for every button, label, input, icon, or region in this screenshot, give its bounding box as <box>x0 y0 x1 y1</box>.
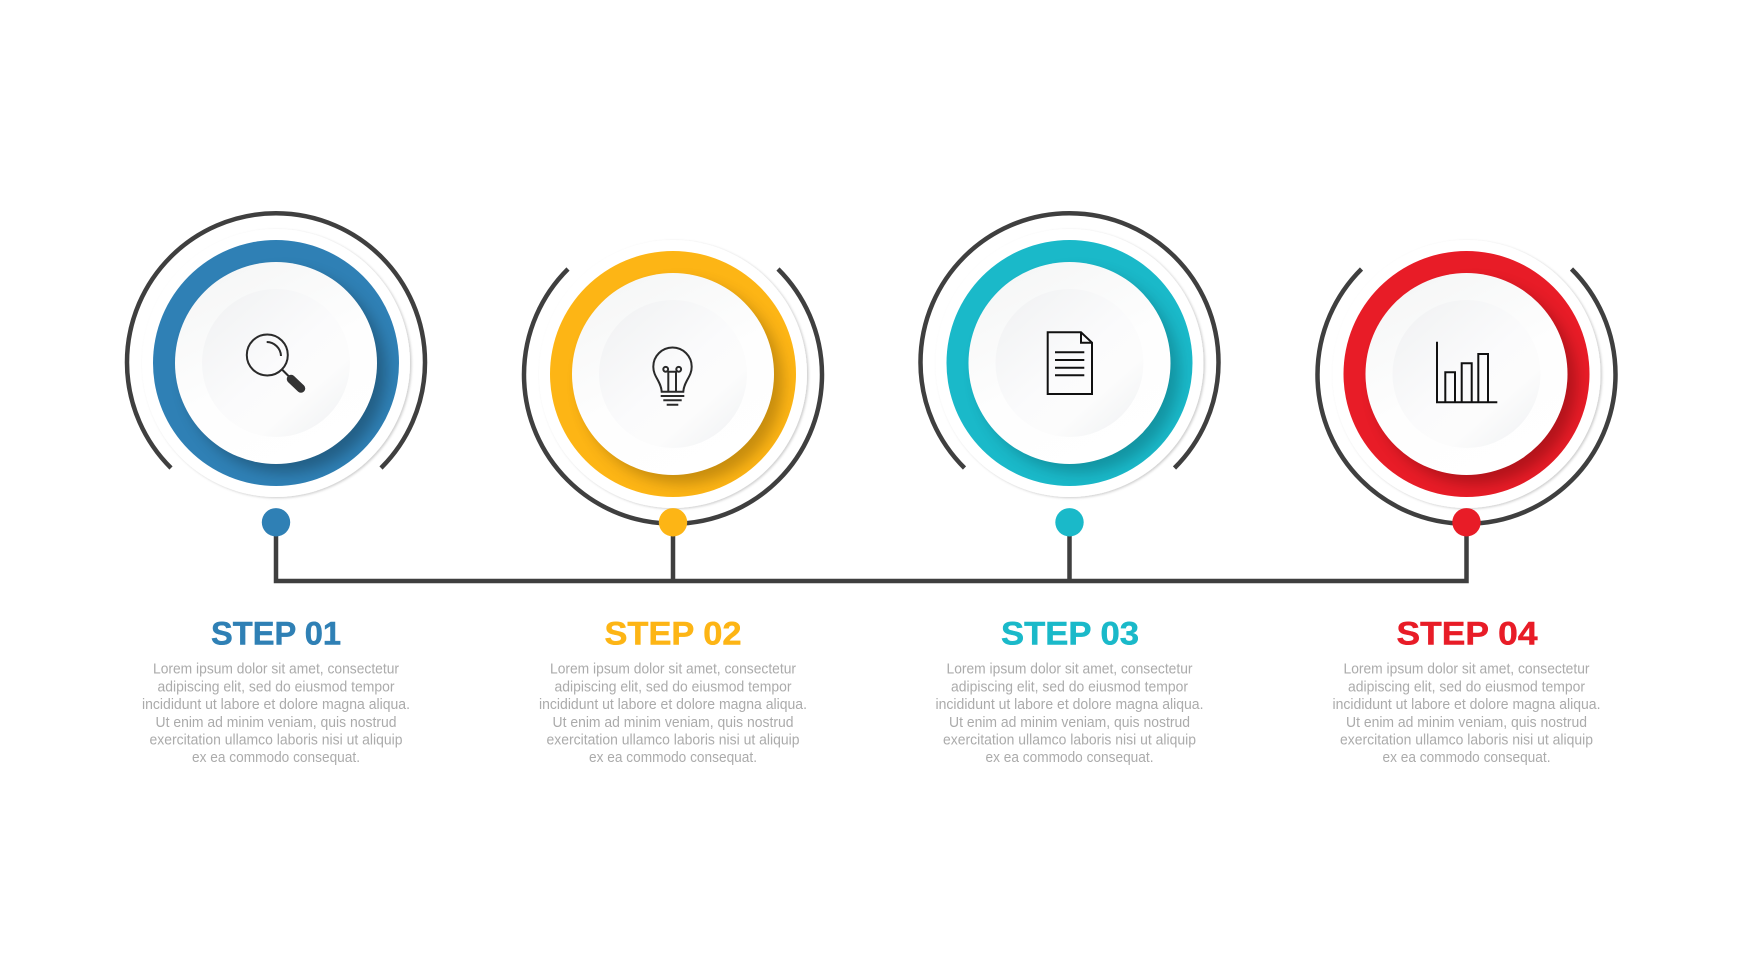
inner disc <box>1392 300 1540 448</box>
text block: step 01: adipiscing elit, sed do eiusmod tempor <box>158 679 395 695</box>
text block: step 01 <box>142 662 410 766</box>
text block: step 02 <box>539 662 807 766</box>
text block: step 02: adipiscing elit, sed do eiusmod tempor <box>554 679 792 695</box>
coloured ring <box>1344 251 1590 497</box>
text block: step 04: incididunt ut labore et dolore magna aliqua. <box>1332 697 1600 713</box>
dot: step 04 <box>1452 508 1481 536</box>
text block: step 02: Ut enim ad minim veniam, quis nostrud <box>552 715 794 731</box>
text block: step 03: incididunt ut labore et dolore magna aliqua. <box>936 697 1204 713</box>
text block: step 01: ex ea commodo consequat. <box>192 750 360 766</box>
icon: light bulb <box>653 347 692 405</box>
ring shadow <box>1374 282 1576 484</box>
panel: step 02 circle <box>524 240 822 524</box>
text block: step 01: incididunt ut labore et dolore magna aliqua. <box>142 697 410 713</box>
text block: step 03 <box>936 662 1204 766</box>
dot: step 02 <box>659 508 687 536</box>
text block: step 03: Lorem ipsum dolor sit amet, consectetur <box>946 662 1193 678</box>
text block: step 02: incididunt ut labore et dolore magna aliqua. <box>539 697 807 713</box>
ring shadow <box>184 271 386 473</box>
text block: step 04: Lorem ipsum dolor sit amet, consectetur <box>1344 662 1590 678</box>
text block: step 01: Ut enim ad minim veniam, quis nostrud <box>156 715 396 731</box>
panel: step 01 circle <box>127 213 425 497</box>
text block: step 04 <box>1332 662 1600 766</box>
text block: step 01: Lorem ipsum dolor sit amet, consectetur <box>153 662 399 678</box>
ring shadow <box>978 271 1180 473</box>
halo disc <box>936 229 1204 497</box>
coloured ring <box>153 240 399 486</box>
heading: step 01: STEP 01 <box>211 616 341 652</box>
heading: step 02: STEP 02 <box>604 616 742 652</box>
icon: bar chart <box>1437 342 1497 402</box>
halo disc <box>539 240 807 508</box>
connector line <box>276 535 1466 581</box>
coloured ring <box>550 251 796 497</box>
outer arc <box>1318 269 1616 524</box>
inner disc <box>599 300 747 448</box>
white plate <box>1366 273 1568 475</box>
dot: step 03 <box>1055 508 1084 536</box>
text block: step 04: ex ea commodo consequat. <box>1382 750 1550 766</box>
heading: step 04: STEP 04 <box>1396 616 1538 652</box>
text block: step 04: Ut enim ad minim veniam, quis nostrud <box>1346 715 1587 731</box>
text block: step 04: adipiscing elit, sed do eiusmod tempor <box>1348 679 1585 695</box>
text block: step 03: adipiscing elit, sed do eiusmod tempor <box>951 679 1188 695</box>
coloured ring <box>946 240 1192 486</box>
text block: step 03: Ut enim ad minim veniam, quis nostrud <box>949 715 1190 731</box>
text block: step 02: exercitation ullamco laboris nisi ut aliquip <box>546 732 800 748</box>
halo disc <box>1332 240 1600 508</box>
heading: step 03: STEP 03 <box>1001 616 1139 652</box>
text block: step 03: exercitation ullamco laboris nisi ut aliquip <box>943 732 1196 748</box>
icon: magnifier <box>247 334 301 388</box>
outer arc <box>921 213 1218 468</box>
inner disc <box>202 289 350 437</box>
white plate <box>175 262 377 464</box>
outer arc <box>524 269 822 524</box>
dot: step 01 <box>262 508 290 536</box>
inner disc <box>996 289 1144 437</box>
white plate <box>572 273 774 475</box>
outer arc <box>127 213 425 468</box>
text block: step 01: exercitation ullamco laboris nisi ut aliquip <box>150 732 402 748</box>
text block: step 02: Lorem ipsum dolor sit amet, consectetur <box>550 662 796 678</box>
white plate <box>968 262 1170 464</box>
panel: step 03 circle <box>921 213 1218 497</box>
icon: document <box>1048 332 1092 394</box>
text block: step 04: exercitation ullamco laboris nisi ut aliquip <box>1340 732 1593 748</box>
halo disc <box>142 229 410 497</box>
panel: step 04 circle <box>1318 240 1616 524</box>
text block: step 02: ex ea commodo consequat. <box>589 750 757 766</box>
text block: step 03: ex ea commodo consequat. <box>986 750 1154 766</box>
ring shadow <box>581 282 783 484</box>
